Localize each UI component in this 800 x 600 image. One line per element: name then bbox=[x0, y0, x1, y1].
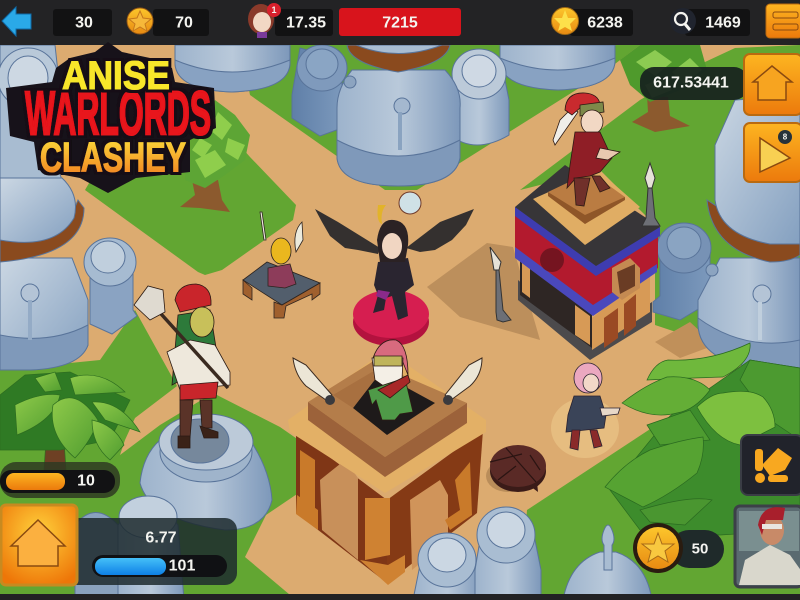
button: bottom left home bbox=[1, 505, 77, 585]
tower: top right centre bbox=[500, 45, 615, 90]
title: WARLORDS: WARLORDS bbox=[25, 80, 211, 148]
brown stone disc bbox=[486, 445, 546, 492]
shadow: below right tower bbox=[655, 322, 715, 358]
counter: 17.35 bbox=[275, 9, 333, 36]
spear: centre right bbox=[490, 247, 511, 322]
orange progress pill: 10 bbox=[77, 472, 95, 490]
hud: top bar bbox=[0, 0, 800, 45]
tower: left big with brown ring bbox=[0, 178, 88, 370]
building: centre brick tower with old man bbox=[288, 350, 486, 585]
sword: right of old man bbox=[443, 358, 482, 405]
spear: near right building bbox=[642, 163, 660, 226]
counter: 30: 30 bbox=[75, 14, 93, 32]
character: top red hat warrior bbox=[553, 93, 620, 206]
tower: top left centre bbox=[175, 45, 290, 92]
counter: 1469: 1469 bbox=[705, 14, 741, 32]
tower: small right of main bbox=[450, 49, 509, 145]
counter: 6238 bbox=[570, 9, 633, 36]
button: menu bbox=[766, 4, 800, 38]
tower: small left of main bbox=[292, 45, 347, 136]
counter: 30 bbox=[53, 9, 112, 36]
red bar: 7215: 7215 bbox=[382, 14, 418, 32]
label: coordinates 617.53441: 617.53441 bbox=[653, 74, 729, 92]
tower cluster: bottom left bbox=[75, 496, 184, 600]
character: angel with wings on red disc bbox=[315, 192, 474, 346]
character: green haired warrior with staff bbox=[134, 284, 230, 448]
panel: blue progress: 6.77 bbox=[145, 530, 177, 546]
red bar: 7215 bbox=[339, 8, 461, 36]
game logo bbox=[6, 42, 216, 193]
leafy plant: bottom right bbox=[605, 343, 800, 535]
hud: bottom strip bbox=[0, 594, 800, 600]
pedestal: warrior base bbox=[140, 414, 272, 530]
tower: bottom centre right bbox=[475, 507, 541, 600]
character: old man bbox=[368, 340, 413, 420]
character: pink haired girl bbox=[551, 363, 620, 458]
counter: 1469 bbox=[685, 9, 750, 36]
tower: right big with brown ring bbox=[698, 96, 800, 368]
leafy plant: left bbox=[0, 372, 140, 470]
coin counter: 50: 50 bbox=[692, 540, 708, 558]
button: orange tag icon bbox=[741, 435, 800, 495]
tower: top left stack bbox=[0, 45, 62, 180]
dome with finial bbox=[563, 525, 652, 600]
tree: upper left bbox=[180, 100, 250, 212]
button: play: 8 bbox=[783, 132, 788, 142]
icon: bronze star coin bbox=[127, 8, 153, 34]
button: play bbox=[744, 123, 800, 182]
icon: girl avatar with notification: 1 bbox=[271, 5, 277, 15]
panel: blue progress: 101 bbox=[169, 558, 195, 574]
counter: 17.35: 17.35 bbox=[286, 14, 326, 32]
tree: top right bbox=[620, 45, 707, 132]
icon: gold star coin bbox=[552, 8, 578, 34]
character: yellow masked warrior on grey platform bbox=[243, 212, 320, 318]
icon: magnifier bbox=[670, 8, 696, 34]
building: right tower with red walls bbox=[515, 165, 660, 360]
icon: girl avatar with notification bbox=[248, 3, 281, 38]
shadow on path bbox=[427, 243, 540, 340]
counter: 70 bbox=[153, 9, 209, 36]
tower: left small bbox=[84, 238, 137, 334]
counter: 6238: 6238 bbox=[587, 14, 623, 32]
icon: back arrow bbox=[2, 7, 31, 36]
title: ANISE: ANISE bbox=[62, 54, 170, 98]
counter: 70: 70 bbox=[175, 14, 193, 32]
portrait: red haired hero bbox=[735, 506, 800, 587]
button: home upgrade bbox=[744, 54, 800, 115]
sword: left of old man bbox=[293, 358, 335, 405]
panel: blue progress bbox=[60, 518, 237, 585]
tower: right small bbox=[653, 223, 711, 320]
tower: main centre bbox=[337, 45, 460, 186]
label: coordinates 617.53441 bbox=[640, 67, 748, 100]
orange progress pill bbox=[0, 462, 120, 498]
coin counter: 50 bbox=[633, 523, 724, 573]
title: CLASHEY: CLASHEY bbox=[40, 134, 186, 180]
tower: bottom centre left bbox=[413, 533, 482, 600]
